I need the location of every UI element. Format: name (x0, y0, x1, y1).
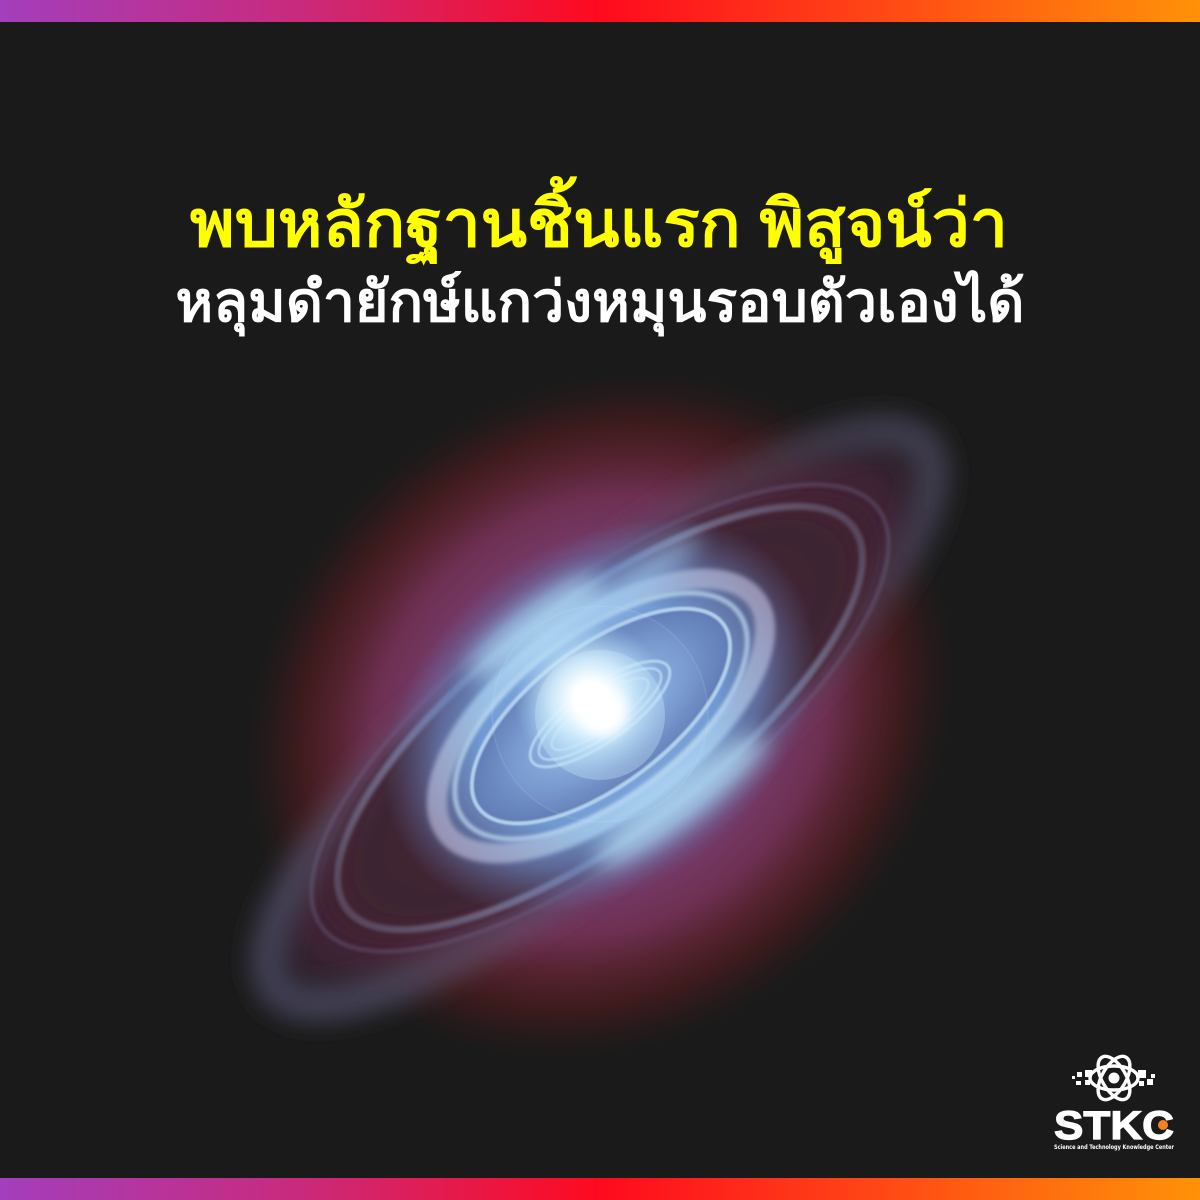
logo icon: atom with pixel squares (1072, 1051, 1155, 1105)
dark hollow between rings (260, 421, 940, 1015)
logo wordmark: STKC (1054, 1104, 1174, 1148)
blue glow band (306, 435, 894, 997)
headline line 2: หลุมดำยักษ์แกว่งหมุนรอบตัวเองได้ (176, 269, 1024, 337)
bright elliptical rings (392, 527, 810, 905)
outer diffuse ring (201, 356, 999, 1080)
thin outer rings (244, 406, 956, 1030)
title (176, 175, 1024, 337)
STKC logo (1054, 1054, 1174, 1151)
lens flare circles (492, 606, 708, 822)
top gradient bar (0, 0, 1200, 22)
outer disc tint (185, 348, 1015, 1088)
nebula: red and magenta glow (108, 232, 1092, 1200)
bottom gradient bar (0, 1178, 1200, 1200)
headline line 1: พบหลักฐานชิ้นแรก พิสูจน์ว่า (190, 175, 1008, 265)
side highlights on the ring (459, 525, 777, 881)
glowing core (514, 622, 666, 774)
inner small rings (516, 643, 684, 785)
